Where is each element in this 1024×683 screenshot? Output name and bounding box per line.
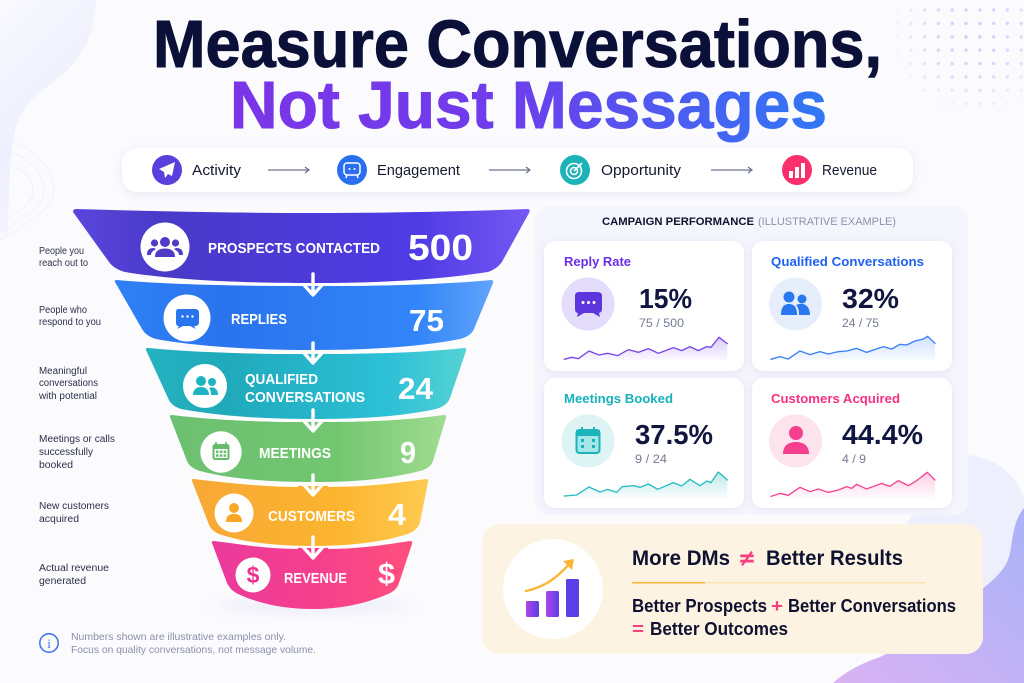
value: dollar: $ (378, 558, 395, 591)
band: meetings (170, 415, 446, 482)
sparkline (564, 337, 727, 360)
card: qualified conversations: 24 / 75 (842, 316, 879, 330)
note: qualified: with potential (38, 391, 97, 402)
note: meetings: successfully (39, 447, 93, 458)
sparkline (564, 472, 727, 497)
title: Not Just Messages (230, 68, 827, 143)
sparkline (771, 336, 935, 360)
footnote text (71, 631, 316, 656)
label: Opportunity: Opportunity (601, 163, 682, 179)
note: revenue: Actual revenue (39, 563, 109, 574)
note: customers: acquired (39, 514, 79, 525)
arrow: prospects to replies (304, 274, 322, 295)
card: reply rate: Reply Rate (564, 254, 631, 269)
band: replies (115, 280, 493, 350)
icon: info (40, 634, 58, 652)
icon: dollar (236, 558, 270, 592)
equation: Better Conversations (788, 596, 956, 616)
label: Revenue: Revenue (822, 163, 877, 179)
footnote text: Focus on quality conversations, not message volume. (71, 644, 316, 656)
value: 4: 4 (388, 497, 407, 532)
label: prospects contacted: PROSPECTS CONTACTED (208, 241, 380, 257)
note: meetings: Meetings or calls (39, 434, 115, 445)
label: meetings: MEETINGS (259, 446, 331, 462)
icon: target (560, 155, 590, 185)
sparkline (771, 472, 935, 497)
equation (632, 596, 956, 639)
label: revenue: REVENUE (284, 571, 347, 587)
card: customers acquired: Customers Acquired (771, 391, 900, 406)
card: reply rate: 15% (639, 283, 692, 314)
divider (632, 582, 926, 584)
note: revenue (39, 563, 109, 587)
note: meetings: booked (39, 460, 73, 471)
note: customers: New customers (39, 501, 109, 512)
title (153, 7, 882, 143)
note: prospects (39, 246, 88, 269)
label: qualified conversations (245, 372, 365, 406)
background contour lines: left (0, 137, 54, 240)
panel heading (602, 216, 896, 228)
card: qualified conversations: 32% (842, 283, 899, 314)
icon: person (769, 414, 822, 468)
note: replies: respond to you (39, 317, 101, 328)
arrow: qualified to meetings (304, 410, 322, 431)
card: meetings booked (544, 378, 744, 508)
equation: + (771, 596, 783, 616)
background dot grid: top right (896, 8, 1023, 106)
equation: = (632, 619, 644, 639)
funnel definitions column (38, 246, 115, 587)
headline (632, 544, 903, 572)
label: customers: CUSTOMERS (268, 509, 355, 525)
background blob: purple, bottom right (833, 508, 1024, 683)
label: Engagement: Engagement (377, 163, 460, 179)
icon: people (769, 278, 822, 330)
value: 75: 75 (409, 303, 444, 338)
card: meetings booked: 9 / 24 (635, 452, 667, 466)
equation: Better Prospects (632, 596, 767, 616)
card: qualified conversations (752, 241, 952, 371)
panel heading: CAMPAIGN PERFORMANCE (602, 216, 754, 228)
arrow: activity to engagement (268, 167, 309, 173)
funnel (73, 209, 530, 614)
note: prospects: reach out to (39, 258, 88, 269)
icon: chat bubble (164, 294, 210, 342)
panel: campaign performance (535, 206, 968, 515)
value: 9: 9 (400, 435, 416, 470)
card: qualified conversations: Qualified Conversations (771, 254, 924, 269)
value: 500: 500 (408, 227, 473, 268)
card: reply rate: 75 / 500 (639, 316, 684, 330)
headline: ≠ (738, 544, 756, 572)
icon: two people (183, 364, 227, 408)
arrow: meetings to customers (304, 475, 322, 495)
stage pill bar (122, 148, 913, 192)
note: revenue: generated (39, 576, 86, 587)
icon: chat (562, 278, 614, 330)
note: customers (39, 501, 109, 525)
note: replies (39, 305, 101, 328)
card: meetings booked: 37.5% (635, 419, 713, 450)
label: replies: REPLIES (231, 312, 287, 328)
background blob: top left (0, 0, 96, 235)
note: replies: People who (39, 305, 87, 316)
note: qualified: conversations (39, 378, 98, 389)
note: meetings (39, 434, 115, 471)
icon: info: i (47, 636, 51, 651)
card: reply rate (544, 241, 744, 371)
icon: person (214, 494, 254, 532)
footnote (40, 631, 316, 656)
headline: Better Results (766, 547, 903, 570)
note: prospects: People you (39, 246, 84, 257)
band: prospects contacted (73, 209, 530, 283)
icon: revenue bars (782, 155, 812, 185)
label: qualified conversations: QUALIFIED (245, 372, 318, 388)
arrow: opportunity to revenue (711, 167, 752, 173)
label: qualified conversations: CONVERSATIONS (245, 390, 365, 406)
note: qualified (38, 366, 98, 402)
arrow: engagement to opportunity (489, 167, 530, 173)
value: 24: 24 (398, 371, 434, 406)
icon: calendar (200, 431, 242, 473)
icon: paper plane (152, 155, 182, 185)
band: revenue (212, 541, 412, 609)
icon: chat bubble (337, 155, 367, 185)
card: customers acquired (752, 378, 952, 508)
footnote text: Numbers shown are illustrative examples only. (71, 631, 286, 643)
note: qualified: Meaningful (39, 366, 87, 377)
icon: three people (140, 222, 190, 272)
equation: Better Outcomes (650, 619, 788, 639)
label: Activity: Activity (192, 163, 242, 179)
title: Measure Conversations, (153, 7, 882, 82)
card: customers acquired: 4 / 9 (842, 452, 866, 466)
band: qualified conversations (146, 348, 466, 419)
card: meetings booked: Meetings Booked (564, 391, 673, 406)
band separators (117, 277, 492, 548)
icon: dollar: $ (247, 562, 260, 588)
icon: growth chart (503, 539, 603, 639)
background blob: light lavender, right (900, 455, 1024, 683)
headline: More DMs (632, 547, 730, 570)
icon: calendar (562, 414, 614, 468)
band: customers (192, 479, 428, 546)
card: customers acquired: 44.4% (842, 419, 923, 450)
arrow: customers to revenue (304, 537, 322, 558)
panel heading: (ILLUSTRATIVE EXAMPLE) (758, 216, 896, 228)
callout: takeaway (482, 524, 983, 654)
arrow: replies to qualified (304, 343, 322, 363)
